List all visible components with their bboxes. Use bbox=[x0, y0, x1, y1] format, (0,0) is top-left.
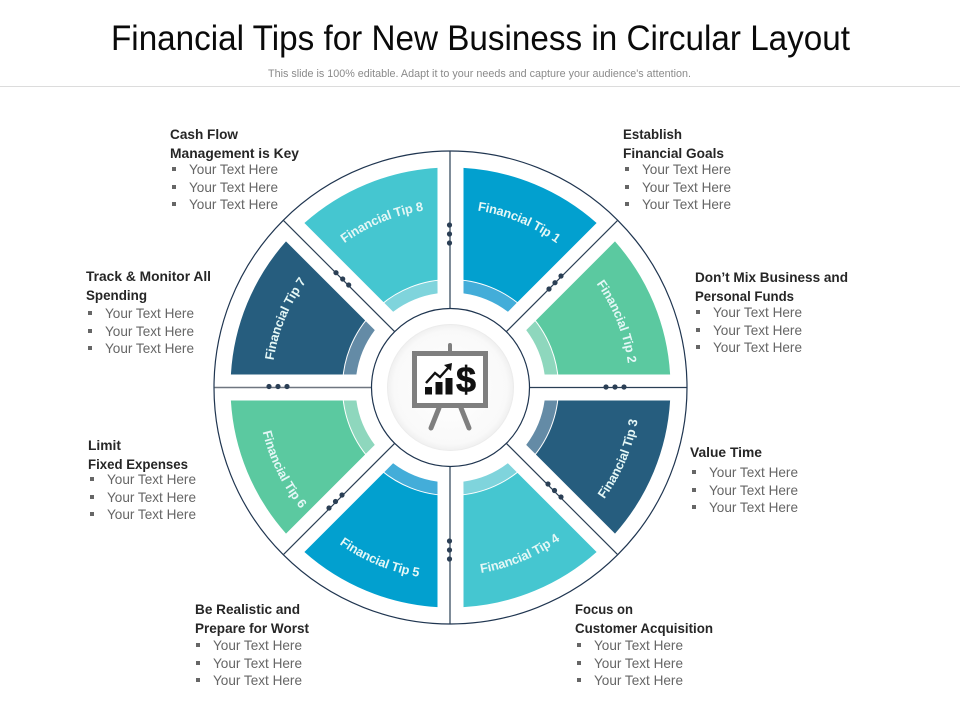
callout: financial goals: Financial Goals bbox=[623, 145, 724, 161]
callout: financial goals: Your Text Here bbox=[642, 179, 731, 195]
center hub bbox=[372, 308, 530, 466]
callout: mix funds: Personal Funds bbox=[695, 288, 794, 304]
callout: mix funds: Don’t Mix Business and bbox=[695, 269, 848, 285]
segment: tip 6 bbox=[192, 338, 388, 534]
segment labels: Financial Tip 1 bbox=[478, 202, 560, 244]
icon: presentation board with chart and dollar bbox=[414, 345, 486, 428]
outer ring bbox=[214, 151, 687, 624]
callout: financial goals: Your Text Here bbox=[642, 196, 731, 212]
segment: tip 3 bbox=[526, 400, 670, 534]
callout: prepare for worst: Your Text Here bbox=[213, 637, 302, 653]
callout: track spending: Spending bbox=[86, 287, 147, 303]
segment labels: Financial Tip 6 bbox=[262, 430, 306, 508]
callout: track spending: Your Text Here bbox=[105, 340, 194, 356]
callout: prepare for worst: Your Text Here bbox=[213, 672, 302, 688]
callout: fixed expenses: Your Text Here bbox=[107, 489, 196, 505]
callout: value time: Your Text Here bbox=[709, 499, 798, 515]
callout: customer acquisition: Customer Acquisition bbox=[575, 620, 713, 636]
icon: presentation board with chart and dollar: $ bbox=[456, 359, 476, 400]
segment labels: Financial Tip 2 bbox=[596, 279, 636, 363]
circular diagram bbox=[213, 150, 688, 625]
callout: prepare for worst bbox=[195, 601, 309, 688]
segment: tip 2 bbox=[513, 241, 709, 437]
callout: cash flow: Your Text Here bbox=[189, 179, 278, 195]
callout: customer acquisition bbox=[575, 601, 713, 688]
callout: financial goals: Your Text Here bbox=[642, 161, 731, 177]
callout: mix funds: Your Text Here bbox=[713, 304, 802, 320]
callout: prepare for worst: Your Text Here bbox=[213, 655, 302, 671]
segment: tip 1 bbox=[464, 168, 597, 312]
callout: mix funds: Your Text Here bbox=[713, 339, 802, 355]
callout: customer acquisition: Your Text Here bbox=[594, 637, 683, 653]
callout: prepare for worst: Be Realistic and bbox=[195, 601, 300, 617]
callout: financial goals bbox=[623, 126, 731, 212]
callout: track spending: Track & Monitor All bbox=[86, 268, 211, 284]
callout: customer acquisition: Your Text Here bbox=[594, 672, 683, 688]
callout: track spending: Your Text Here bbox=[105, 323, 194, 339]
callout: value time: Your Text Here bbox=[709, 482, 798, 498]
callout: mix funds bbox=[695, 269, 848, 355]
callout: fixed expenses: Your Text Here bbox=[107, 506, 196, 522]
callout: track spending: Your Text Here bbox=[105, 305, 194, 321]
callout: value time: Value Time bbox=[690, 444, 762, 460]
segment labels: Financial Tip 7 bbox=[265, 276, 304, 360]
callout: prepare for worst: Prepare for Worst bbox=[195, 620, 309, 636]
segment labels: Financial Tip 3 bbox=[598, 419, 638, 498]
callout: value time bbox=[690, 444, 798, 515]
segment labels: Financial Tip 4 bbox=[480, 534, 560, 573]
title: Financial Tips for New Business in Circular Layout bbox=[111, 19, 850, 58]
callout: cash flow: Cash Flow bbox=[170, 126, 238, 142]
callout: cash flow: Your Text Here bbox=[189, 161, 278, 177]
segment ring bbox=[192, 129, 709, 646]
segment: tip 8 bbox=[304, 129, 500, 325]
callout: customer acquisition: Your Text Here bbox=[594, 655, 683, 671]
segment labels: Financial Tip 8 bbox=[340, 202, 423, 243]
segment labels bbox=[262, 202, 638, 576]
callout: cash flow: Your Text Here bbox=[189, 196, 278, 212]
callout: fixed expenses: Fixed Expenses bbox=[88, 456, 188, 472]
subtitle: This slide is 100% editable. Adapt it to your needs and capture your audience's attention. bbox=[268, 68, 691, 80]
callout: customer acquisition: Focus on bbox=[575, 601, 633, 617]
callout: fixed expenses: Limit bbox=[88, 437, 121, 453]
segment: tip 7 bbox=[231, 241, 375, 374]
callout: fixed expenses bbox=[88, 437, 196, 522]
segment: tip 5 bbox=[304, 463, 438, 607]
callout: track spending bbox=[86, 268, 211, 356]
segment: tip 4 bbox=[401, 450, 597, 646]
callout: financial goals: Establish bbox=[623, 126, 682, 142]
callout: cash flow: Management is Key bbox=[170, 145, 299, 161]
callout: cash flow bbox=[170, 126, 299, 212]
callout: mix funds: Your Text Here bbox=[713, 322, 802, 338]
divider dots bbox=[266, 222, 627, 562]
segment labels: Financial Tip 5 bbox=[340, 537, 420, 576]
callout: fixed expenses: Your Text Here bbox=[107, 471, 196, 487]
callout: value time: Your Text Here bbox=[709, 464, 798, 480]
